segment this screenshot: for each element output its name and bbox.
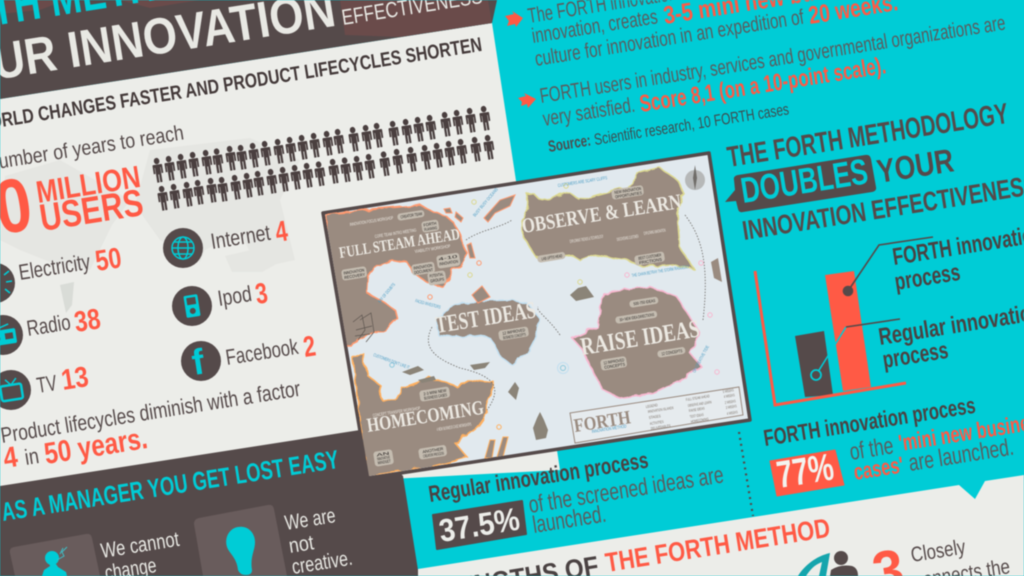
text: users satisfied: Score 8,1 (on a 10-point scale). [638,52,888,118]
map notes: VIABILITY WORKSHOP [414,243,451,254]
label: raise ideas: RAISE IDEAS [579,315,701,361]
row: facebook: 2 [301,330,318,364]
bar chart [755,237,933,405]
map badges: 30+ NEW IDEA DIRECTIONS [619,312,655,322]
stat: forth 77 percent: 77% [774,446,837,497]
map legend: INNOVATION ISLANDS [648,406,674,414]
heading: your: YOUR [874,141,956,190]
map legend: 4 WEEKS [724,393,735,399]
map badges: NEW INNOVATION [614,186,641,195]
card: not creative: not [287,531,316,558]
row: facebook [181,330,318,383]
map legend: RAISE IDEAS [689,406,705,413]
text: source: Source: [547,132,592,156]
panel: dark manager section [0,430,418,576]
map badges: BUSINESS CONCEPTS [503,332,526,340]
map legend: ACTIVITIES [650,420,664,426]
map badges: CREATOR TEAM [400,211,423,219]
map notes: THE CHAIN BETRAY THE STORM RAGGEDLY [631,264,689,278]
map badges: INNOVATION [413,263,433,271]
row: facebook: f [189,340,208,383]
icon: arrow 1 [505,11,523,27]
map badges: CONCEPTS [604,362,626,370]
map badges: INNOVATION [343,267,365,276]
leader: forth [844,237,933,296]
heading: strengths of the forth method: THE FORTH METHOD [603,513,832,576]
label: forth process [891,220,1024,296]
map legend: FORTH [572,407,632,437]
row: radio [0,303,103,355]
panel: dark header band [0,0,497,99]
small islets [444,195,722,458]
panel: light left column [0,23,560,500]
label: forth process: process [893,259,962,296]
text: source: Scientific research, 10 FORTH cases [593,101,790,149]
text: 4 in 50 years: 50 years. [42,422,150,471]
stat: regular 37.5 percent: 37.5% [436,501,522,549]
icon: four and people [798,551,858,576]
label: regular process: process [881,337,950,374]
map badges: 12 IMPROVED [603,357,625,365]
map badges: FRICTIONS [639,257,662,265]
map badges: GROUPS [430,276,445,284]
map legend: DELIVERABLES [651,424,671,431]
ship sketches [402,286,594,440]
map badges: 2-3 MINI NEW [423,388,447,396]
row: tv: TV [35,370,59,398]
map dotted routes [428,215,705,410]
map notes: EXPLORING INNOVATION [643,228,666,236]
stat: forth 77 percent: of the [848,432,895,466]
map badges: LAB UPTIS HEAD [541,253,563,261]
row: ipod: 3 [253,277,270,311]
row: tv [0,361,91,410]
stat: 50 million users: MILLION [34,159,143,210]
stat: 50 million users [0,159,146,257]
text: 4 in 50 years: 4 [1,441,20,475]
map legend: HOMECOMING [691,417,709,424]
map notes: CUSTOMERS DON'T LIKE IT [373,352,410,370]
map legend [570,387,743,443]
map badges [341,185,686,467]
text: 4 in 50 years: in [23,443,41,470]
map notes: CUSTOMERS ARE SCARY CLIFFS [557,175,608,188]
map badges: 500-750 IDEAS [633,298,656,306]
islands with wiggly coasts [325,168,702,476]
map notes: CONCEPT TRANSFER WORKSHOP [372,406,421,418]
stat: regular 37.5 percent: of the screened ideas are [527,461,726,519]
row: internet [163,215,290,268]
row: radio: 38 [72,303,103,339]
label: full steam ahead: FULL STEAM AHEAD [338,226,461,262]
map badges: AN [376,450,390,457]
map legend: 5 WEEKS [723,388,734,394]
map badges: DOCUMENT [414,267,434,275]
map legend: INNOVATION METHOD [591,423,627,434]
map badges: BEST CUSTOMER [638,252,662,261]
map badges: POTENTIAL [429,271,444,279]
map notes: INNOVATION FOCUS WORKSHOP [349,215,394,227]
row: electricity: 50 [93,242,124,278]
stat: forth 77 percent: cases' [852,451,905,485]
map badges: 4-10 [438,253,459,262]
panel: treasure map [323,153,750,478]
map notes: BAY OF DOUBTS [377,282,396,304]
map legend: 3 WEEKS [726,404,737,410]
map notes: CORE TEAM INTRO MEETING [374,227,417,239]
compass [685,165,705,190]
map badges: RECOVERY [344,272,366,280]
map notes: BUSY BUSY OCEANS [472,187,499,218]
map notes: 4 NEW BUSINESS CASE WORKSHOPS [436,422,472,432]
stat: regular 37.5 percent [427,447,726,549]
map legend: TEST IDEAS [690,413,704,419]
text: 4 in 50 years [1,422,150,475]
map badges: OPPORTUNITIES [615,190,642,199]
map legend: LEGEND [646,403,658,409]
heading: as a manager: AS A MANAGER YOU GET LOST EASY [0,444,341,527]
row: electricity: Electricity [17,249,92,285]
divider: dotted [739,432,753,516]
map badges: MINDSET [377,458,391,465]
row: electricity [0,242,124,303]
label: homecoming: HOMECOMING [365,397,486,437]
icon: arrow 2 [518,93,536,108]
map legend: 2 WEEKS [725,399,736,405]
row: tv: 13 [59,361,91,397]
text: source [547,101,790,156]
stat: forth 77 percent [762,392,1024,497]
map legend: FULL STEAM AHEAD [686,394,710,402]
row: internet: Internet [209,220,272,254]
row: internet: 4 [273,215,290,249]
text: product lifecycles: Product lifecycles diminish with a factor [0,376,302,448]
map notes: FACED INVESTORS [415,298,441,310]
map badges: INNOVATION [439,259,458,267]
stat: regular 37.5 percent: Regular innovation process [427,447,650,507]
world map backdrop [0,138,300,313]
map badges: ANOTHER [422,446,444,454]
navigation rings [390,184,719,429]
cliff sketch [353,313,374,342]
row: facebook: Facebook [224,334,301,370]
stat: regular 37.5 percent: launched. [531,501,608,539]
map legend: 4 WEEKS [727,410,738,416]
heading: strengths of the forth method [408,513,832,576]
pictogram: people rows [151,105,496,211]
card: cannot change [10,528,181,576]
label: observe and learn: OBSERVE & LEARN [520,189,683,238]
label: test ideas: TEST IDEAS [434,297,538,339]
map badges: BUSINESS CASES [424,392,447,401]
stat: 50 million users: USERS [37,182,146,240]
card: not creative: We are [283,504,337,535]
map badges: 12 CONCEPTS [661,348,683,356]
map badges: CREATOR PROCESS [423,451,444,459]
map notes: DISCOVERING CUSTOMER [616,234,639,242]
card: not creative [194,504,354,576]
callout: doubles: DOUBLES [738,150,871,211]
panel: light strengths section [418,475,1024,576]
row: radio: Radio [25,309,72,341]
map notes: EXPLORING TRENDS & TECHNOLOGY [569,234,604,244]
map badges: FORTH [423,221,437,228]
item: 3 closely connects: Closely [909,536,967,567]
label: regular process [877,298,1024,374]
map legend: OBSERVE AND LEARN [688,400,712,408]
map badges: PLANNING [424,225,437,232]
text: users satisfied: very satisfied. [541,94,637,131]
callout: doubles [725,150,876,212]
row: ipod: Ipod [216,281,253,311]
map notes: OH CREATIVE TIDE [691,345,710,373]
row: ipod [172,277,270,326]
item: 3 closely connects [868,536,1012,576]
card: cannot change: We cannot [99,528,181,563]
map badges: 12 IMPROVED [502,327,526,336]
map badges: INNOVATIVE [377,454,390,461]
map notes [349,175,710,432]
map legend: STAGES [649,414,661,420]
